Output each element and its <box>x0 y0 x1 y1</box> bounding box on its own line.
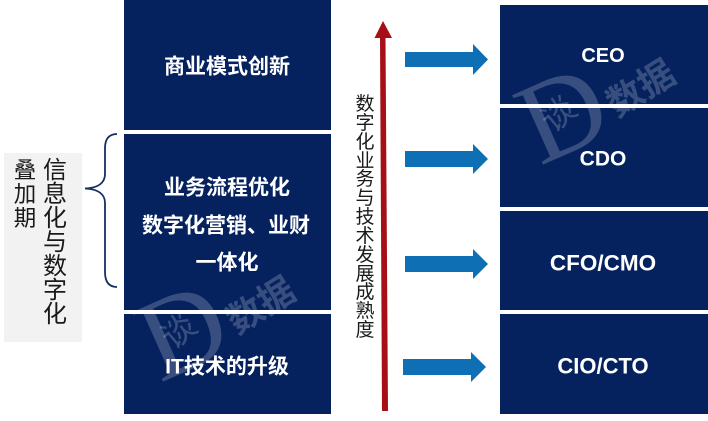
watermark: right <box>499 39 684 190</box>
label: CDO: CDO <box>580 148 626 170</box>
text: digital business and technology maturity: 化 <box>355 131 375 153</box>
text: digital business and technology maturity: 熟 <box>355 300 375 322</box>
watermark: right: D <box>499 39 627 190</box>
arrow: maturity axis <box>374 21 392 411</box>
panel: CEO <box>500 5 708 104</box>
arrow: to CEO <box>405 44 488 75</box>
label: CFO/CMO: CFO/CMO <box>550 250 656 276</box>
text: overlap period: 加 <box>14 182 36 207</box>
panel: CDO <box>500 108 708 207</box>
text: informatization and digitalization: 信 <box>43 157 67 184</box>
heading: IT upgrade: IT技术的升级 <box>165 356 289 378</box>
text: overlap period <box>14 158 36 231</box>
text: digital business and technology maturity: 成 <box>355 281 375 303</box>
text: digital business and technology maturity: 度 <box>355 319 375 341</box>
text block: process optimisation: 数字化营销、业财 <box>142 214 310 238</box>
text: digital business and technology maturity: 展 <box>355 264 375 285</box>
text: digital business and technology maturity: 数 <box>355 93 375 115</box>
panel: left stack <box>124 0 331 414</box>
panel: process optimisation <box>124 134 331 310</box>
label: CIO/CTO: CIO/CTO <box>557 354 649 378</box>
panel: business model innovation <box>124 0 331 130</box>
heading: business model innovation: 商业模式创新 <box>164 54 290 78</box>
arrow: to CDO <box>405 144 488 174</box>
arrow: to CIO/CTO <box>403 352 486 382</box>
panel: IT upgrade <box>124 314 331 414</box>
text: digital business and technology maturity: 与 <box>355 187 375 209</box>
panel: right stack <box>500 5 708 414</box>
label: CEO: CEO <box>581 45 625 67</box>
watermark: left: D <box>119 256 247 407</box>
text: informatization and digitalization: 化 <box>43 205 67 232</box>
watermark: right: 数据 <box>595 45 684 127</box>
text block: process optimisation: 一体化 <box>196 252 258 274</box>
text: informatization and digitalization: 与 <box>43 229 67 256</box>
text: digital business and technology maturity: 业 <box>355 150 375 172</box>
text: digital business and technology maturity: 术 <box>355 225 375 247</box>
panel: CFO/CMO <box>500 211 708 310</box>
text block: process optimisation: 业务流程优化 <box>164 176 290 200</box>
text: digital business and technology maturity <box>355 93 375 341</box>
panel: CIO/CTO <box>500 314 708 414</box>
watermark: left: 数据 <box>215 262 304 344</box>
arrow: to CFO/CMO <box>405 249 488 279</box>
text: digital business and technology maturity: 技 <box>355 206 375 228</box>
watermark: right: 谈 <box>528 82 585 142</box>
text: digital business and technology maturity: 务 <box>355 168 375 190</box>
icon: curly brace <box>85 134 117 287</box>
text: informatization and digitalization: 数 <box>43 253 67 280</box>
text: informatization and digitalization: 字 <box>43 277 67 304</box>
watermark: left: 谈 <box>148 299 205 359</box>
text: digital business and technology maturity: 字 <box>355 112 375 134</box>
text: overlap period: 叠 <box>14 158 36 183</box>
text block: process optimisation <box>142 176 310 274</box>
text: digital business and technology maturity: 发 <box>355 244 375 266</box>
text: overlap period: 期 <box>14 206 36 231</box>
text: informatization and digitalization: 化 <box>43 301 67 328</box>
text: informatization and digitalization <box>43 157 67 328</box>
panel: overlap period label <box>4 153 82 342</box>
watermark: left <box>119 256 304 407</box>
text: informatization and digitalization: 息 <box>43 181 67 208</box>
